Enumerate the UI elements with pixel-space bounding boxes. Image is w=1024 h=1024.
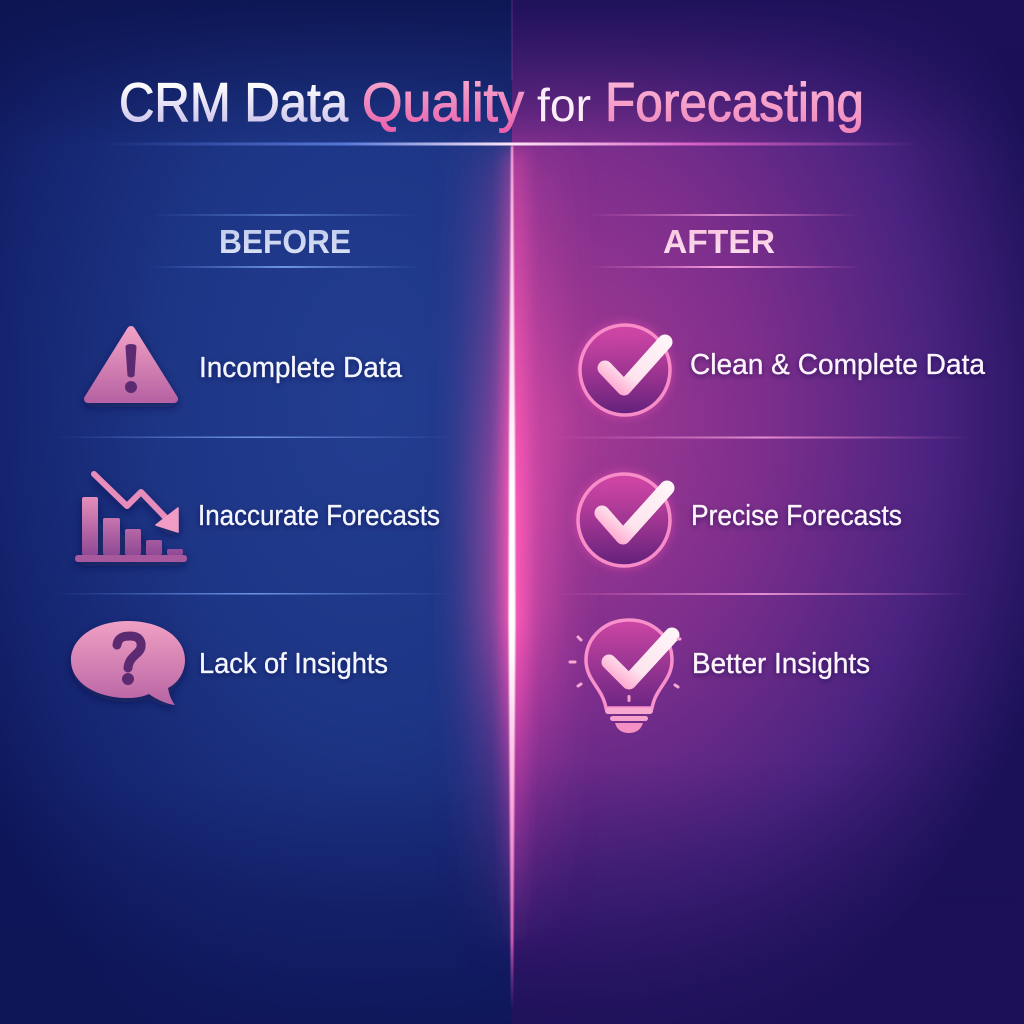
title: for <box>537 79 591 131</box>
text: incomplete data: Incomplete Data <box>199 352 403 384</box>
before header: BEFORE <box>219 223 351 260</box>
title <box>119 71 864 133</box>
background: after panel <box>512 0 1024 1024</box>
icon: check circle 2 <box>576 472 672 568</box>
title: Forecasting <box>605 71 864 133</box>
central glowing divider <box>480 0 552 1010</box>
after header: AFTER <box>663 223 775 260</box>
icon: speech bubble with question mark <box>71 621 185 705</box>
icon: declining bar chart with arrow <box>75 474 187 562</box>
icon: warning triangle <box>88 330 174 399</box>
text: lack of insights: Lack of Insights <box>199 648 388 680</box>
before row dividers <box>55 436 455 594</box>
icon: light bulb with check <box>570 620 680 733</box>
after row dividers <box>555 436 970 595</box>
text: better insights: Better Insights <box>692 648 870 680</box>
background: before panel <box>0 0 512 1024</box>
title: CRM Data <box>119 71 348 133</box>
text: inaccurate forecasts: Inaccurate Forecasts <box>198 500 440 532</box>
icon: check circle 1 <box>578 323 672 417</box>
title rule <box>100 142 920 146</box>
text: precise forecasts: Precise Forecasts <box>691 500 902 532</box>
title: Quality <box>362 71 524 133</box>
text: clean and complete data: Clean & Complete Data <box>690 349 986 381</box>
